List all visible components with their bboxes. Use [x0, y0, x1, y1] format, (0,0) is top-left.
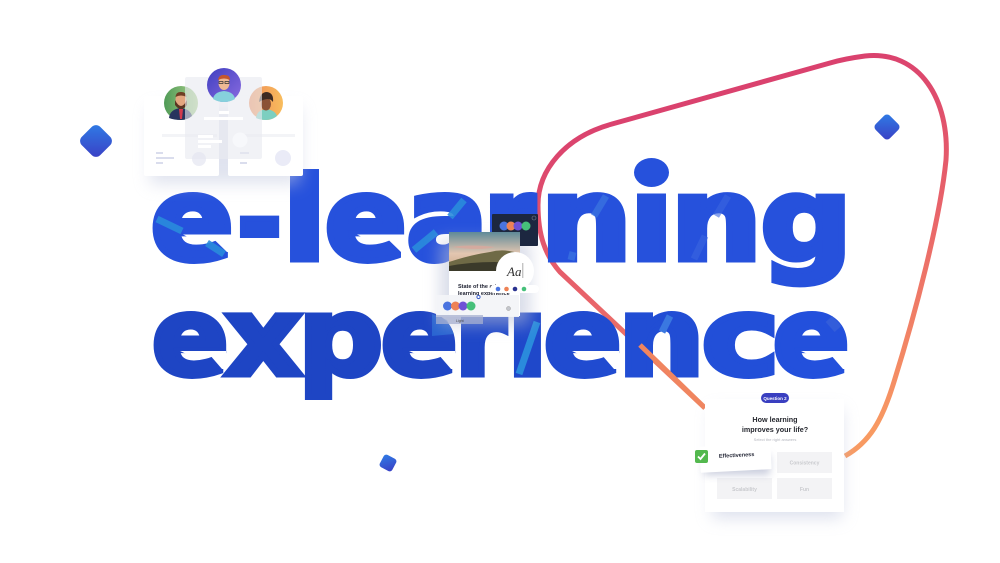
- heading line: experience: [154, 311, 848, 400]
- heading line: e-learning: g: [760, 153, 852, 287]
- heading line: e-learning: n: [670, 153, 762, 287]
- blob segment over letter n: [640, 345, 705, 408]
- quiz heading: [742, 415, 808, 434]
- article title: State of the art: [458, 284, 497, 290]
- heading line: e-learning: i: [630, 153, 673, 287]
- blob outline: [538, 56, 946, 456]
- heading line: experience: i: [507, 274, 548, 400]
- heading line: e-learning: e: [325, 152, 407, 287]
- heading line: e-learning: a: [406, 152, 488, 287]
- option: scalability: [717, 478, 772, 499]
- heading line: e-learning: [150, 152, 852, 288]
- option: consistency: Consistency: [790, 460, 820, 466]
- card: dark palette: [492, 214, 538, 246]
- card: colour picker: [436, 295, 519, 317]
- quiz hint: Select the right answers: [754, 437, 796, 442]
- panel: quiz card: [695, 393, 844, 518]
- icon: green check: [695, 450, 708, 463]
- diamond bottom: [379, 454, 397, 472]
- palette bar: [490, 285, 539, 293]
- heading line: experience: e: [544, 276, 622, 401]
- diamond right: [873, 113, 901, 141]
- quiz heading: improves your life?: [742, 425, 808, 434]
- card: centre frosted: [185, 77, 262, 166]
- avatar: woman: [249, 86, 283, 120]
- typography circle: Aa: [506, 264, 522, 279]
- option: fun: [777, 478, 832, 499]
- heading line: experience: e: [773, 275, 850, 401]
- heading line: experience: p: [298, 274, 383, 400]
- card: left: [144, 96, 219, 176]
- diamond left: [78, 123, 114, 159]
- card: right: [228, 96, 303, 176]
- heading line: e-learning: e: [150, 154, 234, 288]
- heading line: experience: n: [618, 275, 705, 401]
- quiz heading: How learning: [752, 415, 798, 424]
- card: article: learning experience: [458, 291, 510, 297]
- pill: question number: Question 2: [763, 396, 787, 401]
- avatar: bearded man: [164, 86, 198, 120]
- heading line: e-learning: l: [283, 153, 326, 287]
- label: light: Light: [456, 319, 464, 323]
- heading line: e-learning: r: [484, 152, 535, 287]
- heading line: e-learning: n: [540, 153, 632, 287]
- option: effectiveness selected: [695, 443, 772, 475]
- card: article: [449, 232, 520, 316]
- heading line: experience: x: [225, 274, 302, 400]
- option: fun: Fun: [800, 487, 809, 493]
- heading line: experience: e: [152, 275, 229, 401]
- option: scalability: Scalability: [732, 487, 757, 493]
- light streaks on letters: [157, 196, 838, 374]
- option: effectiveness selected: Effectiveness: [719, 452, 754, 460]
- heading line: experience: c: [702, 275, 780, 401]
- heading line: e-learning: -: [237, 154, 282, 288]
- panel: profile cards: [144, 68, 303, 184]
- option: consistency: [777, 452, 832, 473]
- photo: mountain landscape: [449, 232, 520, 271]
- letter e openings: [180, 234, 849, 369]
- heading line: experience: r: [455, 274, 506, 400]
- avatar: man with glasses: [207, 68, 241, 102]
- panel: design components: [436, 214, 539, 325]
- pill: question number: [761, 393, 789, 403]
- heading line: experience: e: [381, 275, 458, 401]
